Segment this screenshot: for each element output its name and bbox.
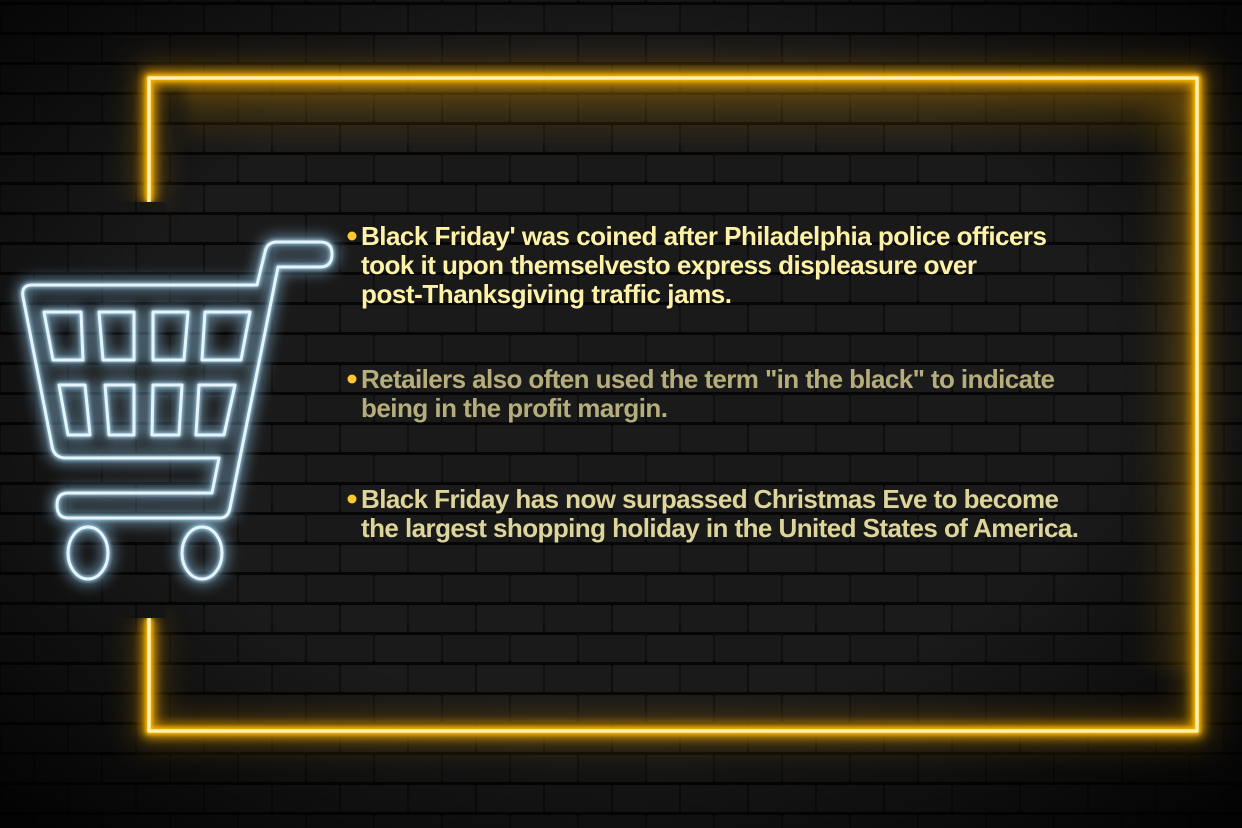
text block: in the black	[348, 364, 1055, 423]
text block: origin of the term	[348, 221, 1047, 309]
neon frame	[149, 78, 1197, 731]
bullet	[348, 374, 356, 384]
bullet	[348, 494, 356, 504]
text block: in the black: Retailers also often used the term "in the black" to indicate	[361, 364, 1055, 394]
bullet	[348, 232, 356, 240]
text block: largest shopping holiday	[348, 484, 1079, 543]
icon: neon shopping cart	[23, 242, 332, 579]
text block: largest shopping holiday: Black Friday has now surpassed Christmas Eve to become	[361, 484, 1059, 514]
text block: in the black: being in the profit margin.	[361, 393, 668, 423]
ambient glow of the neon frame	[149, 78, 1197, 731]
text block: origin of the term: Black Friday' was coined after Philadelphia police officers	[361, 221, 1047, 251]
text block: origin of the term: took it upon themselvesto express displeasure over	[361, 250, 977, 280]
text block: largest shopping holiday: the largest shopping holiday in the United States of America.	[361, 513, 1079, 543]
text block: origin of the term: post-Thanksgiving traffic jams.	[361, 279, 732, 309]
